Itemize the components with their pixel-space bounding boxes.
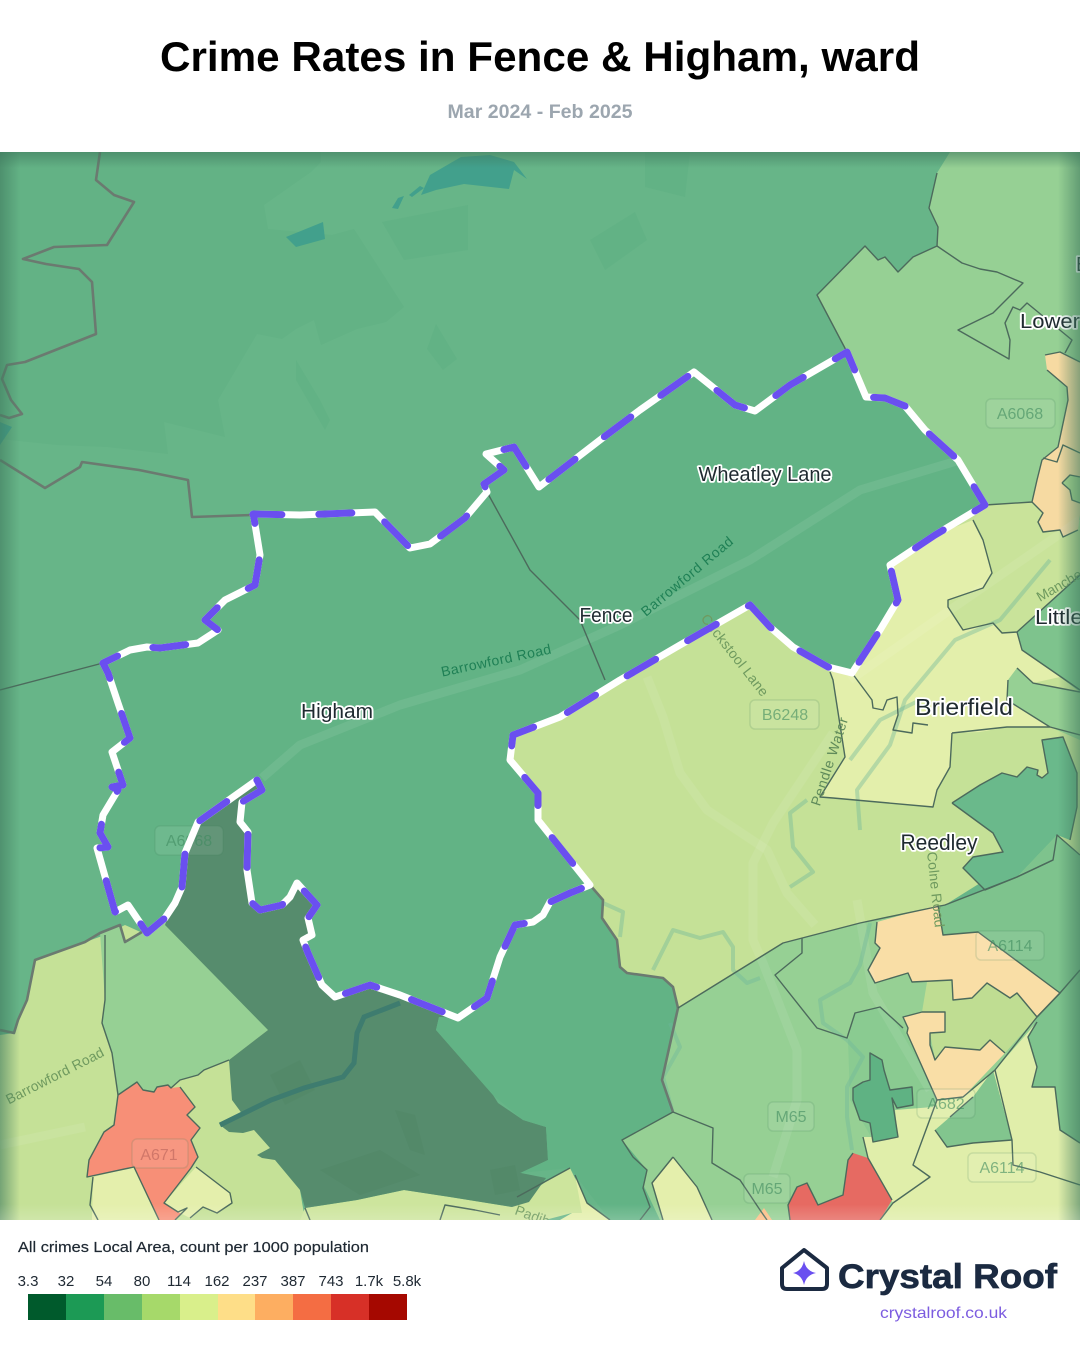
legend scale labels [18,1273,422,1290]
road labels [3,533,1080,1248]
road label: Barrowford Road, Higham: Barrowford Road [440,641,552,680]
region: far-east green [938,835,1080,1143]
wordmark: Crystal Roof [838,1258,1058,1296]
shield: B6248: B6248 [762,707,808,724]
legend scale labels: 54 [96,1273,112,1290]
shield: A682: A682 [927,1096,965,1113]
subtitle: date range: Mar 2024 - Feb 2025 [448,102,633,123]
road label: Barrowford Road, south-west: Barrowford Road [3,1044,106,1107]
shield: A6068 east: A6068 [997,406,1043,423]
subtle terrain patches [296,152,920,870]
legend title: All crimes Local Area, count per 1000 population [18,1239,369,1256]
region: pale orange ward north [868,905,1060,1017]
region: Brierfield pale yellow [820,520,1060,807]
region: yellow-green east strip [1013,502,1032,504]
region: orange fragment bottom [755,1208,772,1220]
region: green inner patch [935,1070,1012,1147]
shield: A6114 north: A6114 [987,938,1033,955]
region: Reedley dark green patch [952,737,1077,890]
region: yellow-green bottom strip [300,1168,587,1220]
place label: Lower: Lower [1020,311,1080,333]
map edge vignette [0,152,1080,1220]
ward boundary: white line with purple dashes [97,352,985,1018]
region: pale estate under pink [92,1167,159,1220]
shield: M65 north [768,1102,814,1131]
lake: west edge [0,422,12,445]
region: light green west [100,918,268,1095]
shield: A6068 east [986,399,1055,428]
shield: A6114 south: A6114 [979,1160,1025,1177]
legend scale labels: 1.7k [355,1273,384,1290]
legend scale labels: 237 [242,1273,268,1290]
map base: low crime green area [0,152,1080,1220]
legend [18,1239,422,1320]
place label: Higham: Higham [301,701,373,723]
river through dark region [220,1003,400,1125]
roads [262,460,1080,1177]
shield: M65 south [744,1174,790,1203]
icon: house with star [782,1250,827,1289]
region: central east green [848,1008,936,1136]
region: pale orange north-east edge [1032,352,1080,537]
road number shields [132,399,1055,1203]
region: medium green patch [853,1053,913,1142]
corner region top-left [0,152,42,170]
shield: A6114 south [968,1153,1036,1182]
region: pale wedge south [863,1107,933,1203]
region: south-east light green [622,835,1080,1220]
shield: M65 south: M65 [751,1181,783,1198]
shield: A682 [917,1089,975,1118]
road label: Cuckstool Lane: Cuckstool Lane [698,611,772,699]
shield: A6068 west [155,826,223,855]
legend scale labels: 162 [204,1273,230,1290]
road label: Padiham Road fragment: Padiham Road [513,1202,605,1248]
legend scale labels: 114 [167,1273,191,1290]
ward south green strip [436,885,678,1220]
region: green east of Brierfield [1007,668,1080,740]
road through yellow-green south-west [0,1127,85,1145]
region: pale estate bottom centre [560,1175,610,1220]
region: pink high crime ward [87,1082,200,1220]
region: green north of Little [1017,575,1080,692]
region: darkest green lowest crime [165,777,548,1208]
area boundary lines [0,152,1080,1220]
place label: Wheatley Lane: Wheatley Lane [698,464,832,486]
region: yellow-green south-west [0,925,305,1220]
legend scale labels: 387 [280,1273,306,1290]
shield: A6068 west: A6068 [166,833,212,850]
shield: A671: A671 [140,1147,178,1164]
rivers [603,560,1050,1150]
road label: Colne Road: Colne Road [924,851,948,928]
region: light green between orange wards [922,980,1037,1060]
shield: A6114 north [976,931,1044,960]
place label: Little: Little [1035,607,1080,629]
legend scale labels: 3.3 [18,1273,38,1290]
website link text: crystalroof.co.uk [880,1305,1008,1322]
place label: Reedley: Reedley [900,830,978,855]
shield: B6248 [750,700,819,729]
legend scale labels: 743 [318,1273,344,1290]
legend scale labels: 32 [58,1273,74,1290]
region: yellow-green south of ward [510,503,1080,1008]
shield: A671 [132,1139,188,1168]
region: pale wedge bottom centre [652,1157,712,1220]
title: Crime Rates in Fence & Higham, ward [160,33,920,80]
legend scale labels: 5.8k [393,1273,422,1290]
lake: north reservoir [421,155,527,195]
region: green notch in orange cluster [1062,475,1080,503]
lake: small reservoir [286,222,325,247]
region: red high crime ward [788,1153,892,1220]
road label: Barrowford Road, Fence: Barrowford Road [638,533,736,619]
region: light green north-east [817,152,1080,530]
region: pale estate right of pink [164,1167,232,1218]
terrain patches in dark region [270,1060,520,1195]
road label: Pendle Water: Pendle Water [807,715,851,808]
place label: Brierfield: Brierfield [915,694,1013,720]
place labels [301,254,1080,855]
brand logo: Crystal Roof [782,1250,1058,1322]
legend colour swatches [28,1294,407,1320]
legend scale labels: 80 [134,1273,150,1290]
region: pale yellow south-east [880,1022,1080,1220]
lakes and reservoirs [0,155,527,445]
ward fill: Fence and Higham [97,352,985,1018]
lake: narrow slits [392,186,424,209]
shield: M65 north: M65 [775,1109,807,1126]
place label: Fence: Fence [580,605,632,627]
region: pale orange ward south [903,1012,1005,1100]
darker moorland zone [0,152,42,170]
